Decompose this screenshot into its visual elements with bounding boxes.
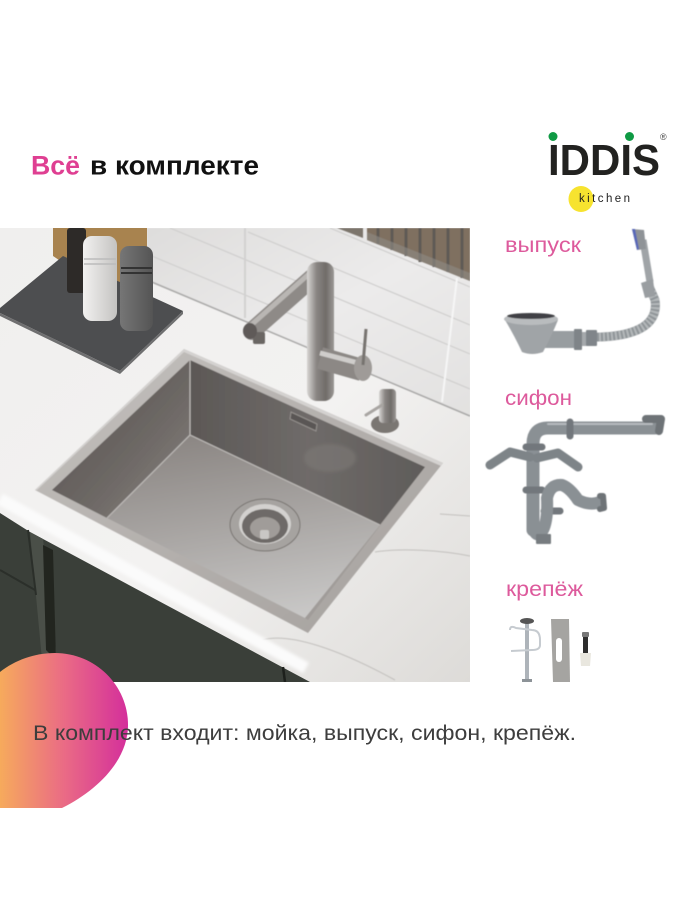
sink left wall: [52, 360, 190, 518]
wooden board: [53, 228, 147, 282]
caption: В комплект входит: мойка, выпуск, сифон, крепёж.: [33, 722, 576, 745]
long horizontal pipe: [533, 428, 655, 530]
sink back wall: [190, 360, 425, 525]
dark bottle: [67, 228, 86, 293]
kitchen word: kitchen: [579, 193, 630, 205]
white mill: [83, 236, 117, 321]
cabinet: [0, 513, 310, 682]
corrugated hose: [587, 284, 655, 337]
drain: [230, 499, 300, 551]
sink: [35, 349, 443, 633]
tiled backsplash: [147, 228, 470, 416]
logo wordmark: IDDIS: [548, 136, 660, 185]
label: выпуск: выпуск: [505, 234, 582, 257]
grey mill: [120, 246, 153, 331]
bottom joint: [533, 530, 543, 535]
registered mark: ®: [660, 132, 667, 142]
grated window: [337, 228, 470, 281]
product: drain assembly: [504, 229, 655, 354]
faucet: [243, 262, 372, 401]
overflow tube: [643, 240, 650, 282]
trap: [543, 485, 600, 530]
yellow spot: [568, 186, 594, 212]
overflow slot: [290, 412, 317, 431]
title: Всё: [31, 150, 80, 180]
logo: IDDIS kitchen: [548, 132, 667, 212]
pipe collars: [526, 422, 570, 511]
gradient blob: [0, 653, 128, 808]
logo green dots: [548, 132, 634, 141]
drain bowl: [505, 320, 558, 354]
label: сифон: сифон: [505, 387, 572, 410]
marble veins: [262, 514, 470, 680]
sink rim: [35, 349, 443, 633]
sink right wall: [306, 540, 369, 619]
product: fasteners: [510, 618, 591, 682]
counter front edge highlight: [0, 499, 306, 668]
product: siphon: [490, 419, 661, 544]
top outlet: [646, 419, 661, 431]
clamp rod: [510, 618, 540, 682]
slate tray: [0, 256, 183, 371]
title: в комплекте: [90, 150, 259, 180]
steel plate: [551, 619, 570, 682]
soap dispenser: [366, 389, 399, 433]
side arms: [490, 452, 530, 465]
screw with plug: [580, 632, 591, 666]
label: крепёж: крепёж: [506, 578, 583, 601]
horizontal pipe: [540, 331, 578, 348]
sink floor: [107, 435, 380, 618]
countertop: [0, 228, 470, 682]
photo: kitchen sink: [0, 228, 470, 682]
